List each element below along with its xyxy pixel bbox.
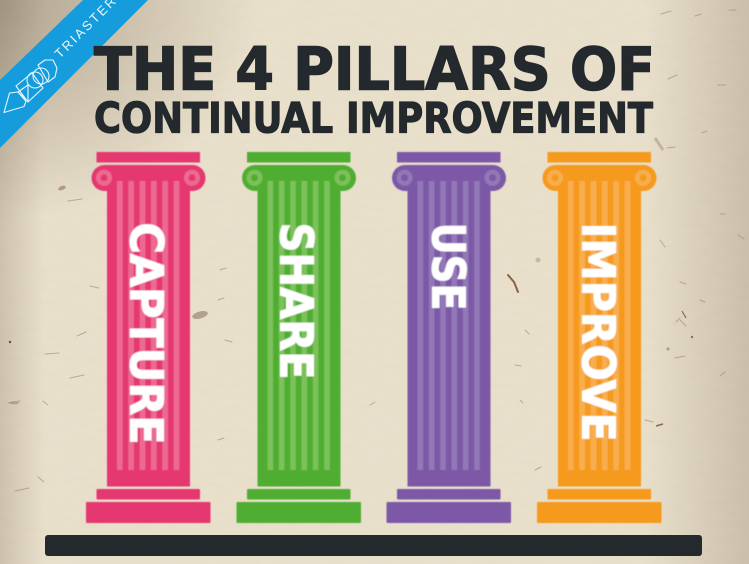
top slab — [397, 152, 500, 162]
pillar: use — [386, 152, 511, 523]
lower base — [236, 502, 361, 523]
lower base — [86, 502, 210, 523]
icon: Triaster logo — [4, 60, 57, 112]
upper base — [96, 489, 200, 500]
flutes — [268, 181, 330, 470]
capital with volutes — [392, 165, 506, 191]
label: SHARE — [270, 222, 322, 380]
title line 2: CONTINUAL IMPROVEMENT — [94, 94, 653, 142]
banner: Triaster logo ribbon — [0, 0, 148, 148]
upper base — [397, 489, 500, 500]
flutes — [418, 181, 480, 470]
capital with volutes — [92, 165, 206, 191]
pillar: share — [236, 152, 361, 523]
shaft — [258, 190, 340, 486]
label: USE — [422, 222, 474, 310]
title — [94, 35, 655, 142]
title line 1: THE 4 PILLARS OF — [94, 35, 655, 103]
shaft — [558, 190, 641, 486]
top slab — [247, 152, 350, 162]
flutes — [117, 181, 179, 470]
shaft — [408, 190, 490, 486]
label: IMPROVE — [572, 222, 624, 442]
pillar: capture — [86, 152, 210, 523]
flutes — [568, 181, 630, 470]
shaft — [107, 190, 190, 486]
label: CAPTURE — [120, 222, 172, 444]
lower base — [386, 502, 511, 523]
upper base — [247, 489, 350, 500]
top slab — [548, 152, 651, 162]
capital with volutes — [242, 165, 356, 191]
top slab — [96, 152, 200, 162]
capital with volutes — [542, 165, 656, 191]
upper base — [548, 489, 651, 500]
pillar: improve — [537, 152, 662, 523]
foundation bar — [45, 535, 702, 556]
lower base — [537, 502, 662, 523]
